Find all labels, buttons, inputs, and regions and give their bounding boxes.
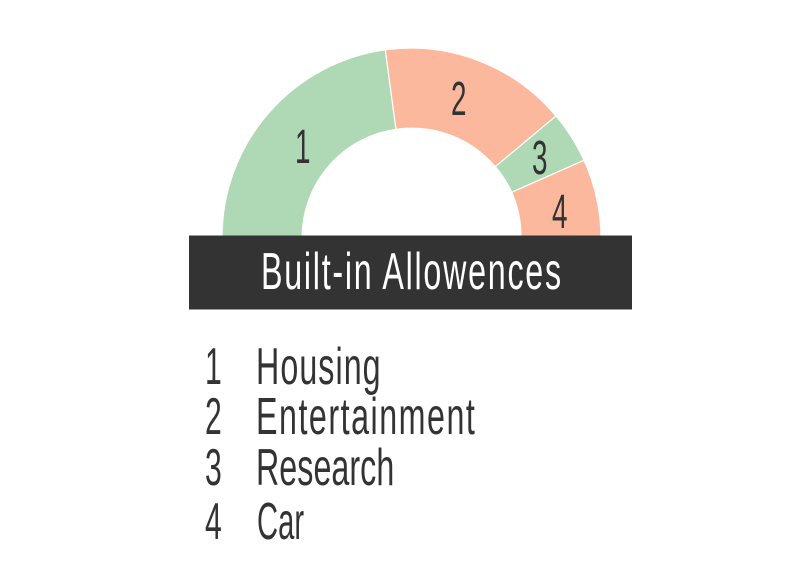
segment 2: entertainment: [385, 48, 556, 167]
title banner: Built-in Allowences: [261, 243, 561, 301]
legend row 2: Entertainment: [256, 388, 475, 446]
segment 4: car: 4: [552, 185, 567, 239]
half-donut chart: [222, 48, 601, 239]
legend row 2: 2: [205, 389, 222, 446]
legend row 4: 4: [205, 494, 222, 551]
legend: [205, 338, 475, 551]
legend row 4: Car: [257, 492, 304, 550]
legend row 4: [205, 492, 304, 551]
segment 4: car: [512, 160, 601, 239]
legend row 1: Housing: [256, 338, 381, 396]
legend row 3: 3: [205, 440, 222, 497]
segment 3: research: 3: [532, 131, 547, 185]
legend row 1: 1: [205, 339, 222, 396]
segment 1: housing: 1: [295, 120, 310, 174]
segment 1: housing: [222, 50, 396, 237]
title banner: [189, 236, 632, 310]
legend row 3: Research: [256, 439, 394, 497]
segment 3: research: [495, 116, 584, 192]
segment 2: entertainment: 2: [451, 72, 466, 126]
